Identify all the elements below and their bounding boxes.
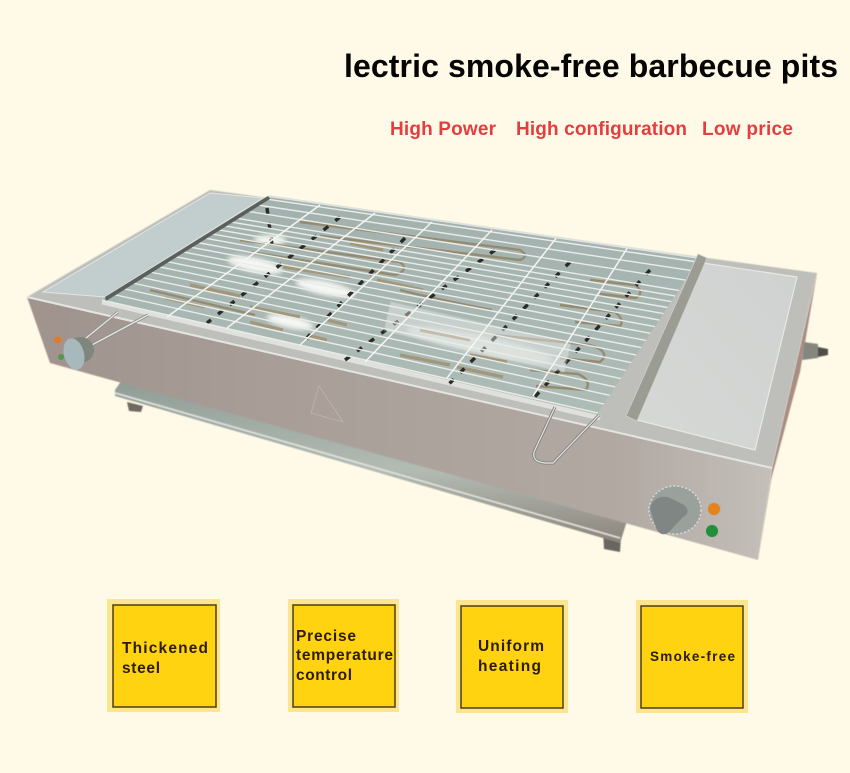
- grill bed: [102, 196, 700, 413]
- feature card: Uniform heating: [456, 600, 568, 713]
- subtitle: selling points: Low price: [702, 119, 793, 140]
- subtitle: selling points: High Power: [390, 119, 497, 140]
- feature card: Precise temperature control: [288, 599, 399, 712]
- right side panel: [637, 263, 797, 450]
- grill rack cross wires: [167, 205, 628, 396]
- power connector: [802, 342, 828, 360]
- rack back edge: [268, 196, 700, 258]
- warning triangle mark: [311, 386, 343, 422]
- feature card: Thickened steel: Thickened: [122, 640, 208, 657]
- heating element loops: [150, 222, 640, 390]
- grill right side: [758, 273, 817, 560]
- right rack rail: [626, 254, 707, 421]
- title: lectric smoke-free barbecue pits: [344, 48, 838, 84]
- subtitle: selling points: High configuration: [516, 119, 687, 140]
- subtitle: selling points: [390, 119, 793, 140]
- watermark: [384, 302, 571, 373]
- feature card: Smoke-free: [636, 600, 748, 713]
- feature card: Smoke-free: Smoke-free: [650, 649, 735, 664]
- right handle: [534, 407, 599, 463]
- reflections: [226, 235, 555, 370]
- dark support lines: [207, 208, 650, 400]
- left handle: [80, 312, 148, 346]
- grill rack long wires: [102, 199, 697, 413]
- feature card: Thickened steel: steel: [122, 660, 160, 677]
- feature card: Precise temperature control: temperature: [296, 647, 393, 664]
- tan element strips: [165, 243, 507, 377]
- grill front face: [27, 297, 772, 560]
- left control knob and lights: [54, 336, 94, 372]
- barbecue grill illustration: [27, 190, 828, 560]
- feature card: Thickened steel: [107, 599, 220, 712]
- feature card: Uniform heating: heating: [478, 658, 541, 675]
- feature card: Uniform heating: Uniform: [478, 638, 544, 655]
- right control knob and lights: [649, 486, 720, 538]
- left rack rail: [105, 196, 270, 301]
- grill top rim: [27, 190, 817, 468]
- feature card: Precise temperature control: Precise: [296, 628, 356, 645]
- left side panel: [43, 193, 263, 297]
- grill under tray and legs: [115, 380, 628, 552]
- feature card: Precise temperature control: control: [296, 667, 352, 684]
